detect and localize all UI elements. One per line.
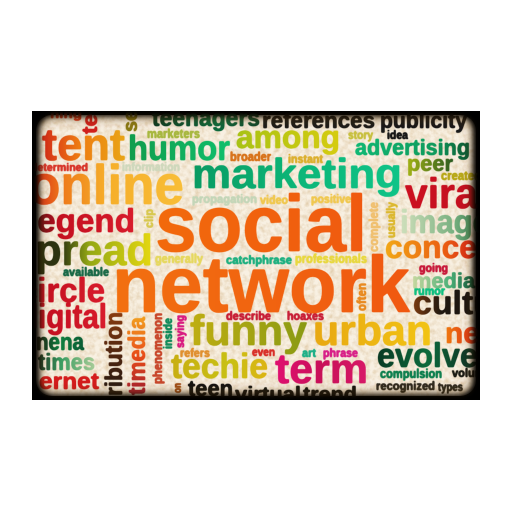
word: saying rotated: saying bbox=[173, 315, 187, 348]
panel: aged paper word cloud bbox=[35, 112, 477, 398]
word: peer: peer bbox=[407, 151, 453, 176]
word: rumor: rumor bbox=[414, 284, 445, 298]
word: broader: broader bbox=[230, 150, 271, 164]
word: on rotated: on bbox=[172, 383, 184, 393]
word: network: network bbox=[112, 240, 410, 329]
word: urban: urban bbox=[313, 307, 432, 355]
word: viral: viral bbox=[405, 170, 489, 218]
word: idea: idea bbox=[387, 130, 409, 142]
word: publicity: publicity bbox=[380, 108, 468, 133]
word: going: going bbox=[419, 261, 448, 275]
word: phrase: phrase bbox=[323, 346, 358, 360]
word: usually rotated: usually bbox=[384, 202, 398, 238]
word: techie: techie bbox=[171, 347, 268, 386]
word: phenomenon rotated: phenomenon bbox=[150, 313, 165, 384]
word: propagation: propagation bbox=[192, 194, 257, 206]
paper background bbox=[36, 115, 476, 396]
word: humor: humor bbox=[128, 129, 230, 168]
word: se rotated: se bbox=[120, 110, 142, 132]
word: spread: spread bbox=[11, 226, 153, 275]
word: instant: instant bbox=[288, 152, 323, 166]
word: legend: legend bbox=[28, 202, 135, 239]
word: hoaxes: hoaxes bbox=[287, 309, 324, 323]
word: internet: ernet bbox=[39, 368, 99, 394]
word: marketers: marketers bbox=[147, 127, 200, 141]
word: positive: positive bbox=[311, 192, 351, 206]
word: determined: determined bbox=[31, 162, 88, 174]
word: complete rotated: complete bbox=[366, 202, 381, 252]
word: teen: teen bbox=[188, 376, 233, 401]
word: voluntary: voluntary bbox=[452, 366, 502, 380]
word: funny: funny bbox=[190, 307, 307, 355]
word: tent: tent bbox=[42, 119, 125, 170]
word: marketing: marketing bbox=[192, 150, 402, 197]
word: te rotated: te bbox=[79, 114, 102, 134]
word: art: art bbox=[302, 346, 316, 360]
word: compulsion: compulsion bbox=[380, 367, 442, 381]
word: image: image bbox=[400, 203, 490, 240]
word: concept: concept bbox=[385, 229, 507, 265]
word: digital: digital bbox=[20, 298, 107, 336]
word: among: among bbox=[236, 119, 340, 155]
burnt edge vignette: brown bbox=[0, 80, 512, 430]
word: online: online bbox=[28, 153, 184, 216]
word: marketing (top fragment): ning bbox=[50, 107, 82, 121]
black photo frame bbox=[32, 111, 480, 400]
word: clip: clip bbox=[142, 209, 156, 228]
word: describe: describe bbox=[226, 309, 271, 323]
word: information: information bbox=[122, 160, 180, 174]
word: types: types bbox=[438, 382, 463, 394]
word: teenagers: teenagers bbox=[152, 105, 260, 131]
word: multimedia rotated: timedia bbox=[124, 316, 151, 395]
word: references: references bbox=[262, 108, 375, 133]
word: distribution rotated: ribution bbox=[101, 312, 128, 396]
word: social: social bbox=[155, 179, 367, 268]
word: recognized: recognized bbox=[376, 379, 435, 393]
word: inside rotated: inside bbox=[161, 318, 175, 349]
word: generally: generally bbox=[155, 252, 203, 266]
word: media: media bbox=[412, 270, 475, 293]
word: new: new bbox=[445, 317, 504, 350]
word: often rotated: often bbox=[354, 283, 369, 311]
word: times: times bbox=[38, 349, 95, 375]
burnt edge vignette: black bbox=[0, 80, 512, 430]
word: video: video bbox=[260, 193, 288, 207]
word: term: term bbox=[275, 345, 368, 392]
word: catchphrase: catchphrase bbox=[226, 253, 292, 267]
word: virtual: virtual bbox=[235, 384, 301, 406]
word: trend: trend bbox=[303, 384, 357, 406]
word: refers: refers bbox=[180, 346, 210, 360]
word: available: available bbox=[63, 265, 109, 279]
word: created: created bbox=[441, 169, 481, 183]
paper mottling texture bbox=[36, 115, 476, 396]
word: circle: circle bbox=[19, 272, 105, 310]
word: professionals: professionals bbox=[295, 252, 367, 266]
word: story: story bbox=[348, 128, 373, 142]
word: advertising: advertising bbox=[355, 135, 470, 160]
word: nena: nena bbox=[36, 329, 85, 356]
word: even: even bbox=[252, 345, 275, 359]
word cloud bbox=[35, 112, 477, 396]
word: evolve: evolve bbox=[377, 337, 478, 375]
